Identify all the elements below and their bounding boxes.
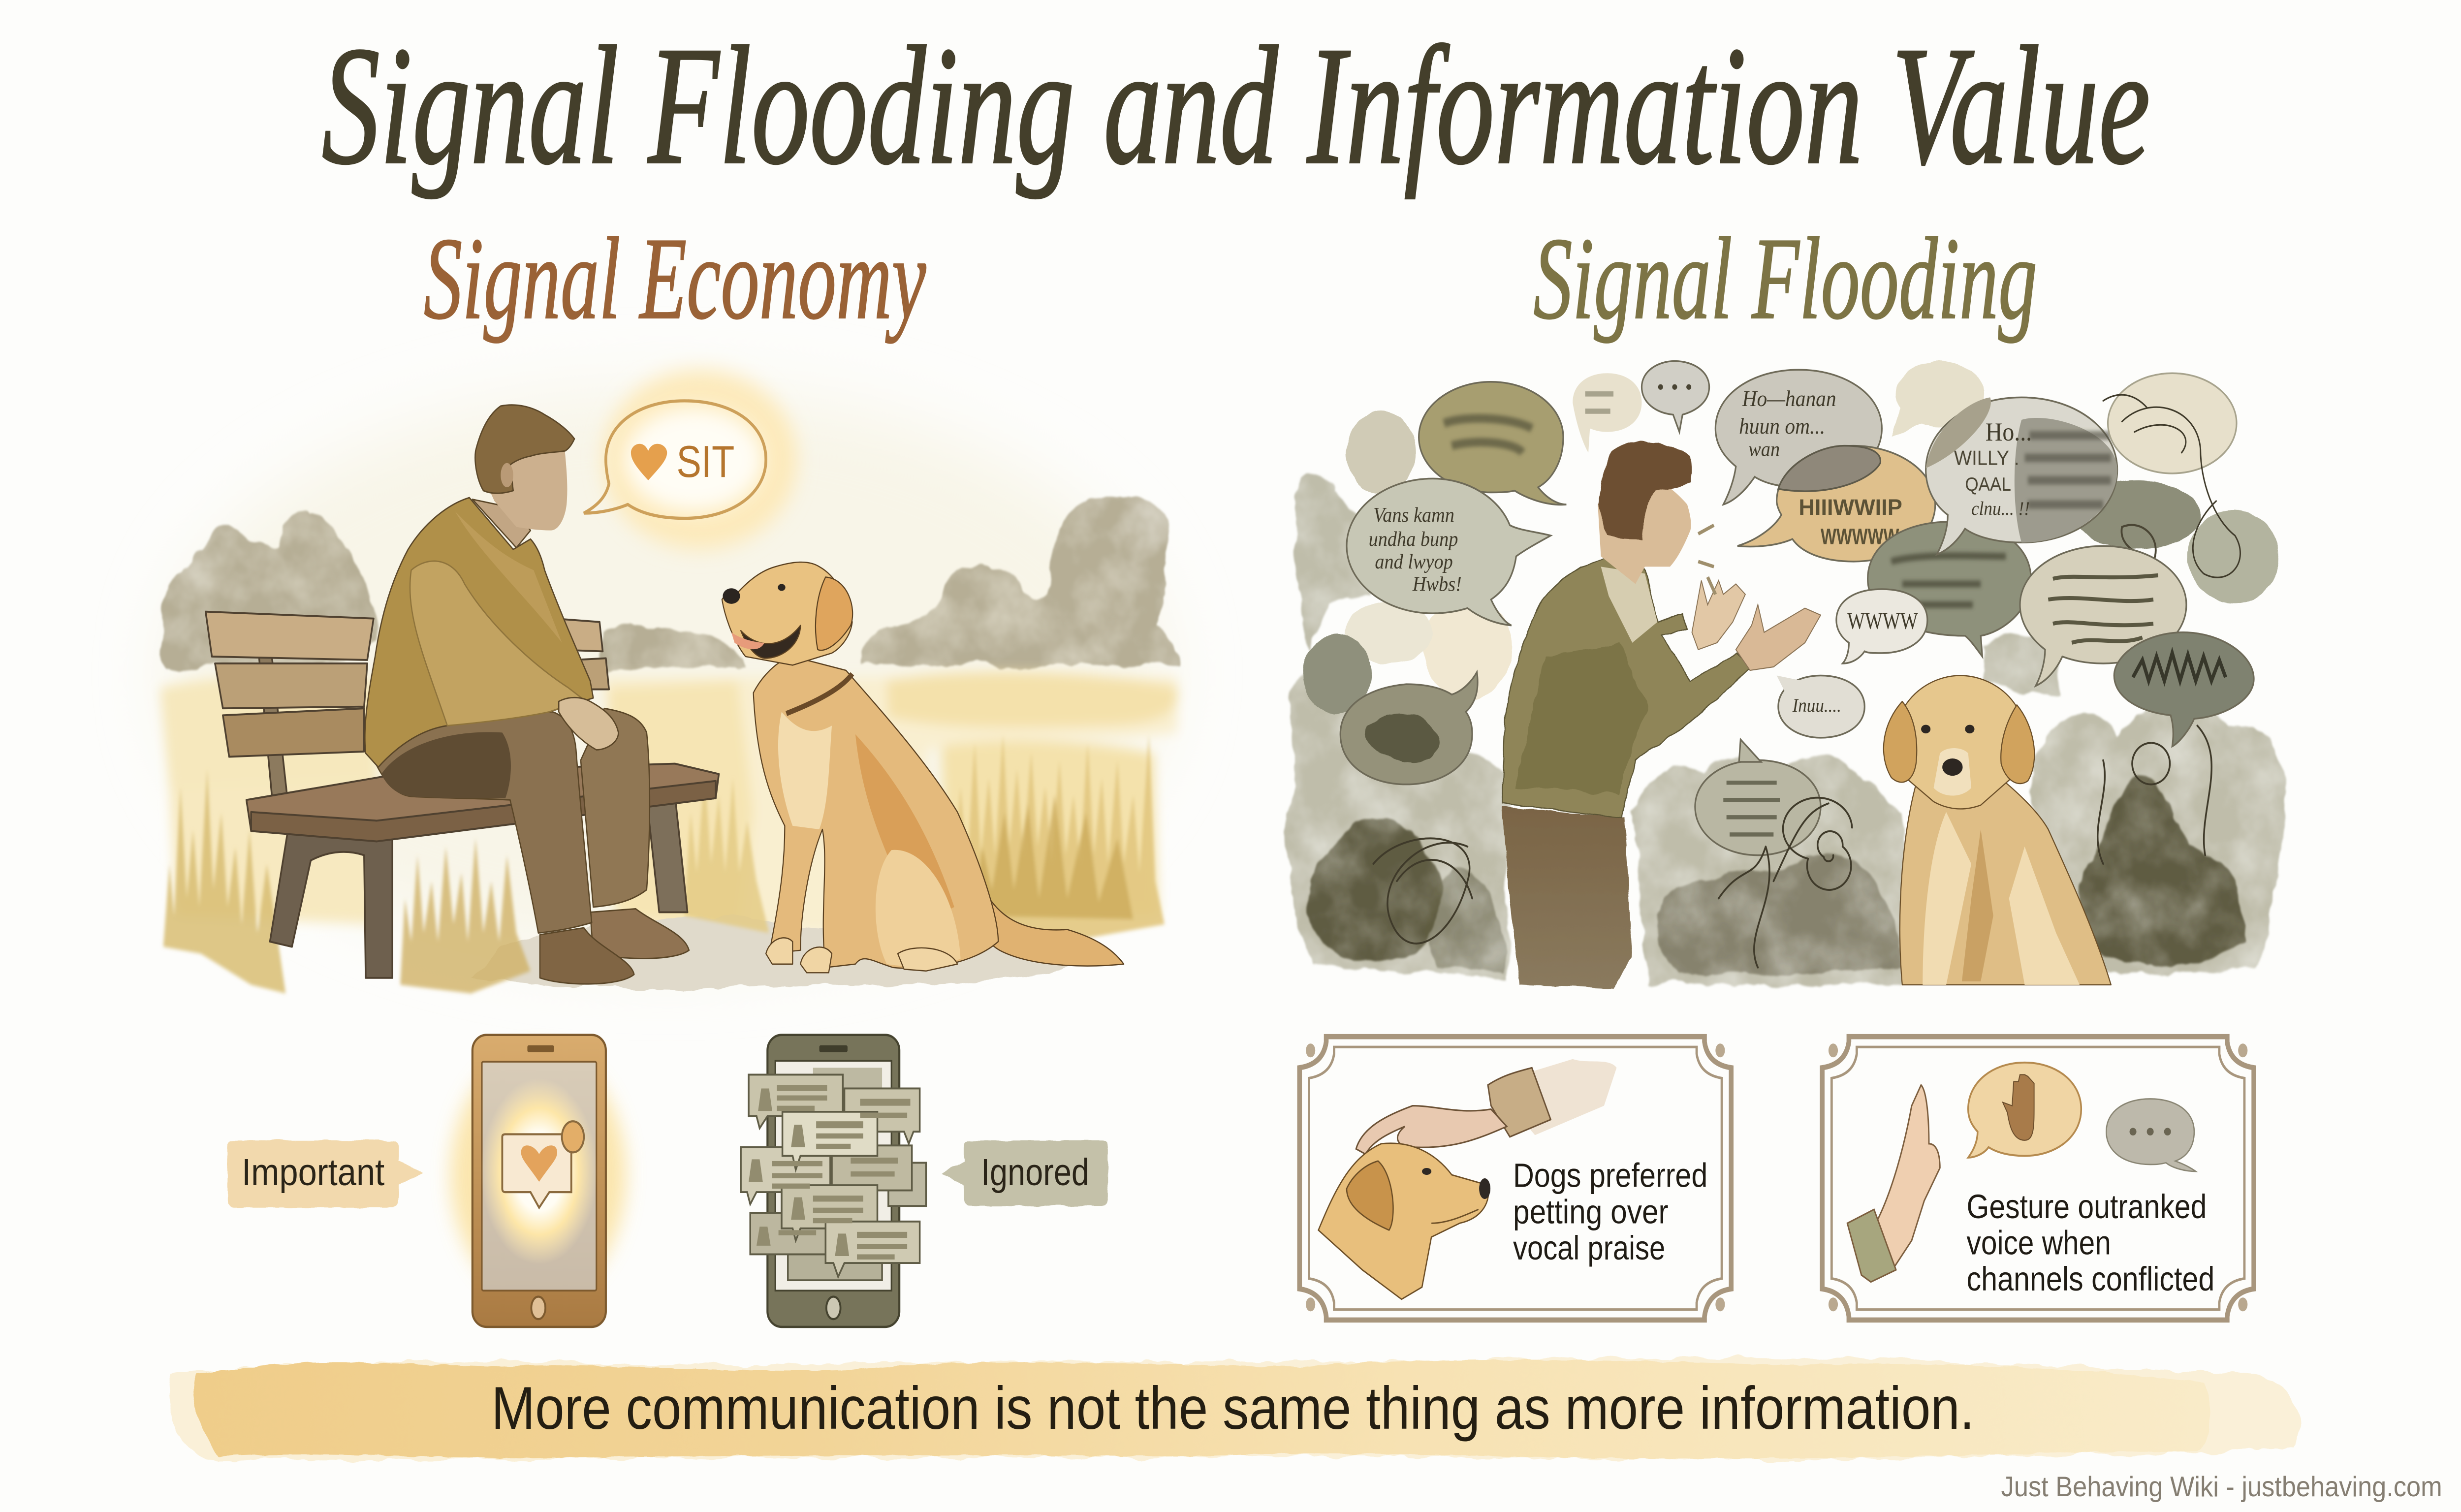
collar — [787, 674, 852, 714]
banner: takeaway: More communication is not the same thing as more information. — [491, 1374, 1974, 1442]
phone: important — [450, 1035, 626, 1327]
bubble: dark sage lower right — [2114, 632, 2254, 746]
bubble: olive — [1419, 382, 1566, 504]
text: petting: petting over — [1513, 1193, 1669, 1230]
path — [471, 918, 1099, 989]
haunch — [876, 850, 961, 966]
bubble: left grey-green: Hwbs! — [1412, 572, 1462, 596]
footer credit: Just Behaving Wiki - justbehaving.com — [2001, 1471, 2442, 1502]
paws — [766, 938, 792, 964]
heading: signal flooding: Signal Flooding — [1533, 214, 2037, 344]
pale background bubbles — [1303, 361, 2279, 714]
frame — [1822, 1037, 2254, 1320]
bubble: large pale — [1926, 397, 2117, 555]
bubble: left grey-green: Vans kamn — [1373, 503, 1454, 527]
bubble: dark sage — [1868, 522, 2031, 657]
text: gesture: voice when — [1967, 1224, 2111, 1261]
label: important — [227, 1140, 424, 1208]
banner: takeaway — [169, 1357, 2300, 1460]
bubble: WWW: WWWW — [1847, 608, 1918, 634]
text: gesture: channels conflicted — [1967, 1260, 2214, 1298]
bubble: small Inuu: Inuu.... — [1792, 695, 1841, 716]
icon: raised hand — [1847, 1085, 1940, 1282]
bubble: small Inuu — [1777, 676, 1864, 738]
icon: gesture bubble — [1968, 1063, 2081, 1158]
text: petting: vocal praise — [1513, 1229, 1665, 1267]
bubble: tan: WWWWW — [1821, 525, 1899, 549]
hands — [1692, 580, 1745, 650]
bubble: large pale: WILLY . — [1954, 446, 2019, 470]
hair — [1598, 441, 1692, 539]
label: ignored: Ignored — [981, 1151, 1089, 1194]
bubble: beige lines — [2020, 546, 2186, 686]
bubble: grey top middle: Ho—hanan — [1742, 386, 1836, 411]
dog sitting — [722, 562, 1124, 973]
sad dog — [1884, 676, 2111, 985]
icon: dog profile — [1319, 1143, 1490, 1299]
icon: message with heart — [502, 1121, 584, 1208]
label: ignored — [942, 1140, 1108, 1206]
background washes — [1287, 474, 2286, 985]
face — [479, 414, 567, 531]
bubble: large pale: clnu... !! — [1971, 498, 2030, 519]
pants — [1502, 807, 1632, 988]
scribbles — [1373, 725, 2211, 968]
bubbles: small top — [1573, 361, 1709, 453]
bubble: left grey-green — [1347, 478, 1551, 626]
label: important: Important — [242, 1151, 384, 1194]
nose and eye — [723, 588, 740, 604]
mouth — [741, 626, 800, 658]
ear — [816, 577, 852, 650]
panel: signal economy scene — [160, 370, 1180, 993]
icon: speech bubble SIT — [584, 370, 797, 549]
bubble: grey top middle — [1715, 370, 1882, 504]
phone: ignored — [741, 1035, 926, 1327]
tail — [975, 873, 1124, 966]
far leg — [581, 708, 650, 907]
bubble: left grey-green: and lwyop — [1375, 550, 1453, 573]
hands — [559, 697, 618, 750]
icon: voice bubble — [2106, 1099, 2196, 1171]
heading: signal economy: Signal Economy — [424, 214, 926, 344]
background trees — [163, 496, 1180, 670]
icon: speech bubble SIT: SIT — [676, 437, 734, 487]
face — [1598, 467, 1691, 584]
bubble: tan — [1737, 446, 1935, 562]
sweater — [365, 498, 593, 767]
bubble: lines lower — [1695, 739, 1821, 855]
icon: heart — [631, 444, 667, 480]
neck — [473, 499, 531, 548]
shoe far — [590, 909, 689, 958]
man seated — [365, 405, 689, 984]
shoe near — [540, 928, 634, 984]
bubble: large pale: Ho... — [1986, 417, 2032, 446]
bubble: large pale: QAAL — [1965, 473, 2011, 495]
text: petting — [1513, 1157, 1707, 1267]
field wash — [160, 672, 1178, 933]
notification glyphs — [749, 1085, 910, 1260]
grass tufts — [163, 734, 1165, 993]
near leg — [377, 712, 592, 933]
hair — [475, 405, 574, 493]
text: gesture — [1967, 1188, 2214, 1298]
notification stack — [741, 1068, 926, 1280]
bubble: beige with scribble — [2103, 373, 2240, 577]
bubble: WWW — [1836, 589, 1927, 663]
bench — [206, 612, 719, 978]
torso — [1502, 549, 1752, 817]
speech marks — [1698, 525, 1715, 595]
dark washes — [1309, 776, 2246, 976]
bubble: left grey-green: undha bunp — [1369, 528, 1458, 551]
text: gesture: Gesture outranked — [1967, 1188, 2207, 1225]
panel: signal flooding scene — [1287, 361, 2286, 988]
bubble: grey top middle: huun om... — [1739, 414, 1825, 439]
bubble: dark left — [1340, 672, 1478, 785]
icon: hand petting — [1356, 1059, 1616, 1154]
text: petting: Dogs preferred — [1513, 1157, 1707, 1194]
frame — [1299, 1037, 1731, 1320]
body — [754, 657, 998, 968]
man speaking — [1502, 441, 1821, 988]
panel: gesture finding — [1822, 1037, 2254, 1320]
head — [722, 562, 852, 665]
bubble: grey top middle: wan — [1748, 438, 1780, 461]
panel: petting finding — [1299, 1037, 1731, 1320]
bubble: tan: HIIIWWIIP — [1798, 495, 1902, 520]
